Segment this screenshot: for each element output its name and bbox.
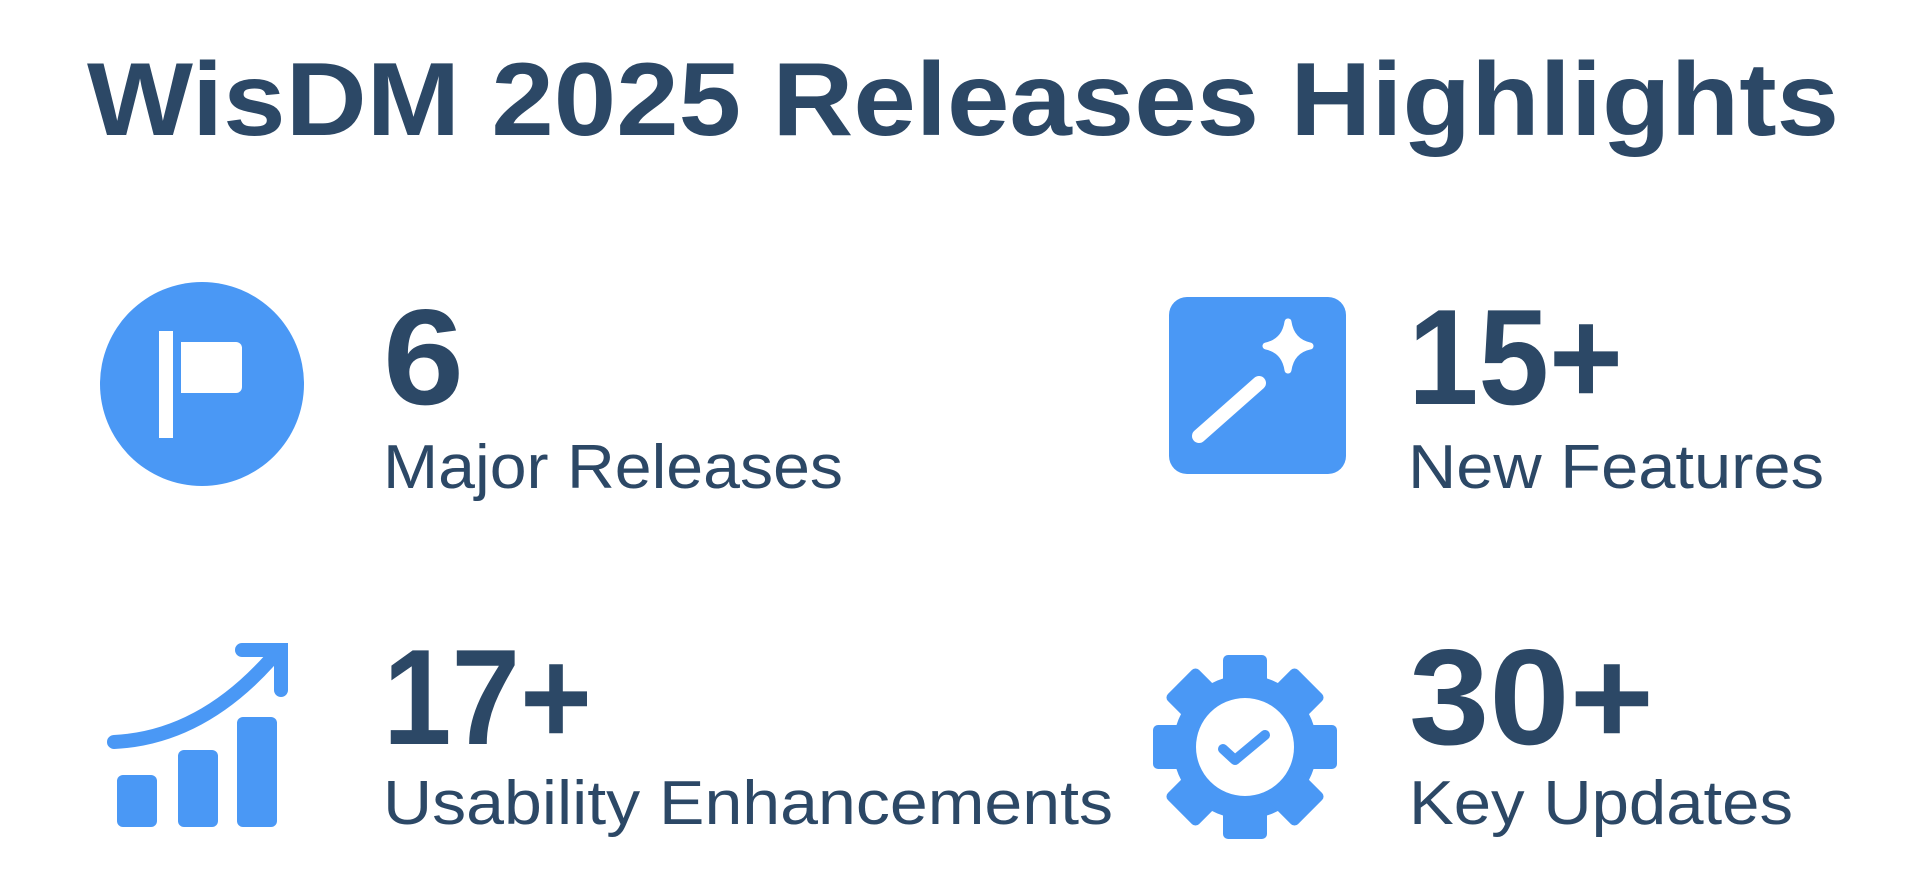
- stat: key updates: 30+: [1409, 621, 1654, 773]
- stat: new features: New Features: [1408, 433, 1824, 502]
- stat: major releases: [383, 281, 843, 502]
- title: WisDM 2025 Releases Highlights: [87, 42, 1839, 158]
- stat: major releases: 6: [383, 281, 464, 433]
- stat: new features: [1408, 281, 1824, 502]
- stat: usability enhancements: Usability Enhancements: [383, 769, 1113, 838]
- icon: growth chart: [114, 650, 281, 827]
- stat: new features: 15+: [1408, 281, 1623, 433]
- stat: key updates: [1409, 621, 1793, 838]
- icon: gear check: [1153, 655, 1337, 839]
- stat: major releases: Major Releases: [383, 433, 843, 502]
- stat: usability enhancements: 17+: [383, 621, 592, 773]
- icon: magic wand: [1169, 297, 1346, 474]
- stat: key updates: Key Updates: [1409, 769, 1793, 838]
- stat: usability enhancements: [383, 621, 1113, 838]
- icon: flag circle: [100, 282, 304, 486]
